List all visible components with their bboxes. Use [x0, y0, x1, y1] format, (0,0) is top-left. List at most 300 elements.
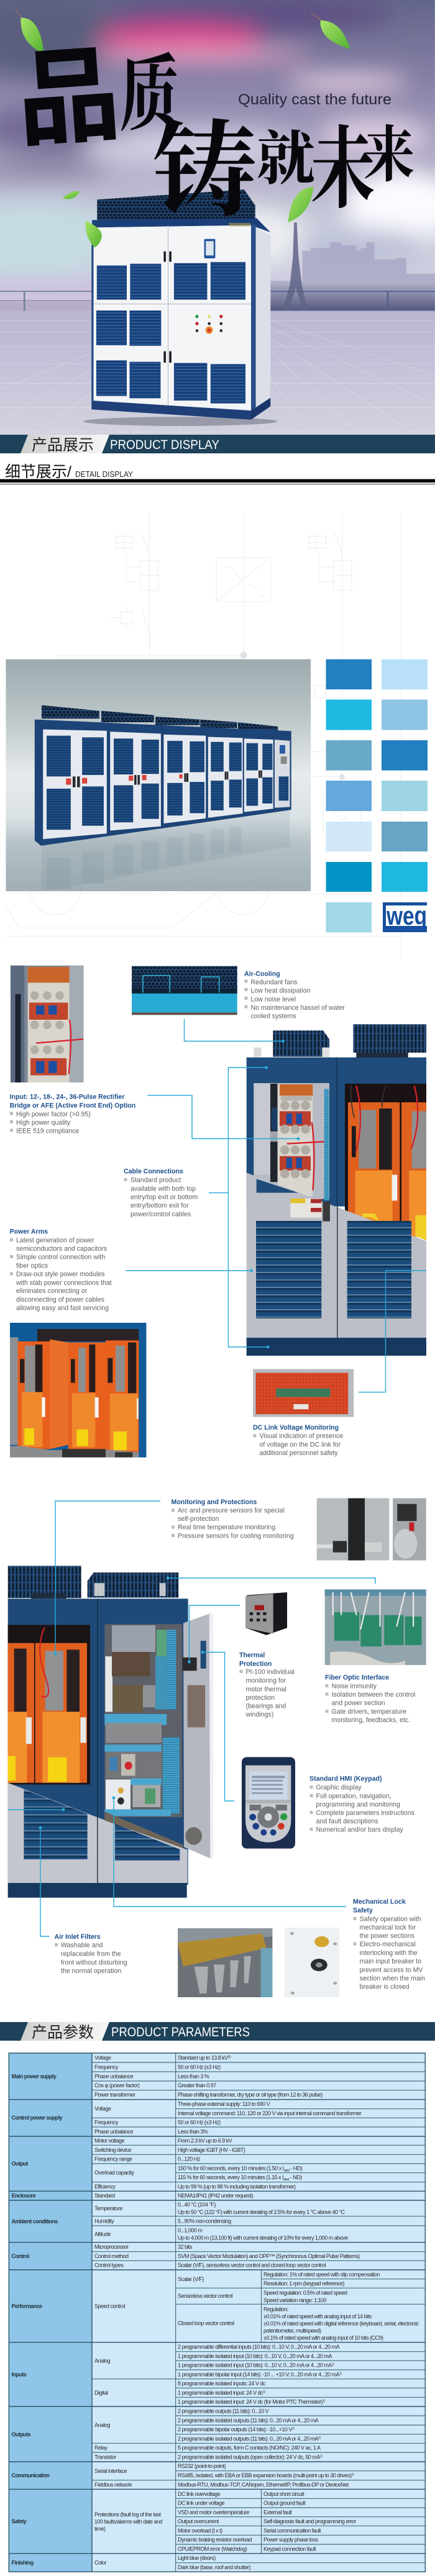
- yellow warning tags: [362, 1213, 426, 1240]
- table values: From 2.3 kV up to 6.9 kV: [178, 2138, 232, 2144]
- table values: 1): [320, 2454, 323, 2458]
- table group labels: Outputs: [11, 2431, 31, 2438]
- text: mechanical lock safety: Safety: [353, 1907, 373, 1914]
- louvres: [24, 1789, 180, 1861]
- text: air inlet filters: Washable and: [61, 1941, 103, 1949]
- text: fiber optic interface: Fiber Optic Interface: [325, 1674, 389, 1682]
- text: standard HMI: Standard HMI (Keypad): [309, 1775, 382, 1782]
- table values: RS232 (point-to-point): [178, 2463, 226, 2469]
- table parameter names: Analog: [94, 2357, 111, 2364]
- table values: VSD and motor overtemperature: [178, 2509, 249, 2515]
- power section: [8, 1625, 90, 1785]
- section banner: product parameters: 产品参数: [32, 2024, 94, 2041]
- text: power arms: semiconductors and capacitors: [16, 1245, 107, 1253]
- connector: HMI: [201, 1651, 234, 1801]
- text: monitoring and protections: [172, 1499, 294, 1540]
- table values: ±0.01% of rated speed with digital reference (keyboard, serial, electronic: [263, 2321, 419, 2327]
- table parameter names: Phase unbalance: [94, 2129, 134, 2135]
- text: fiber optic interface: Gate drivers, temperature: [332, 1708, 406, 1715]
- section banner: product parameters: [0, 2022, 435, 2041]
- table values: Less than 3 %: [178, 2073, 209, 2079]
- text: mechanical lock safety: prevent access to MV: [360, 1966, 423, 1974]
- eiffel tower: [282, 222, 308, 311]
- warning labels: [66, 774, 183, 785]
- terminals at base: [10, 1446, 139, 1458]
- table parameter names: Color: [94, 2560, 107, 2566]
- table group labels: Output: [11, 2161, 28, 2167]
- text: cable connections: entry/top exit or bottom: [130, 1194, 198, 1201]
- leaf on cabinet: [85, 221, 102, 247]
- text: DC link: Visual indication of presence: [260, 1433, 343, 1440]
- text: thermal protection: Protection: [239, 1660, 272, 1667]
- table values: 8 programmable isolated inputs: 24 V dc: [178, 2380, 266, 2387]
- text: standard HMI: [309, 1775, 414, 1834]
- text: air-cooling: cooled systems: [251, 1013, 296, 1020]
- text: standard HMI: and fault descriptions: [316, 1818, 378, 1825]
- text: power arms: eliminates connecting or: [16, 1287, 88, 1295]
- table parameter names: Serial interface: [94, 2468, 127, 2474]
- text: DC link: [253, 1424, 343, 1457]
- cabinet body: [8, 1599, 188, 1885]
- section banner: product parameters: PRODUCT PARAMETERS: [111, 2025, 250, 2039]
- text: power arms: Power Arms: [10, 1228, 48, 1236]
- table values: 1 programmable isolated input: 24 V dc: [178, 2390, 263, 2396]
- text: input rectifier: High power quality: [16, 1119, 71, 1127]
- table values: 2 programmable bipolar outputs (14 bits): -10...+10 V: [178, 2426, 292, 2433]
- section banner: product display: [0, 435, 435, 454]
- text: air-cooling: Redundant fans: [251, 979, 297, 986]
- table values: 2 programmable isolated outputs (open collector): 24 V dc, 50 mA: [178, 2454, 320, 2460]
- table parameter names: Transistor: [94, 2454, 116, 2460]
- text: cable connections: [124, 1168, 198, 1218]
- text: fiber optic interface: Isolation between the control: [332, 1691, 415, 1698]
- power module 1: [17, 1341, 50, 1449]
- text: mechanical lock safety: [353, 1898, 425, 1991]
- table values: 2 programmable isolated outputs (11 bits): 0...20 mA or 4...20 mA: [178, 2417, 319, 2423]
- louvres: [256, 1221, 411, 1318]
- table parameter names: Frequency range: [94, 2156, 132, 2162]
- cabinet body: [247, 1058, 426, 1207]
- table group labels: Communication: [11, 2472, 49, 2478]
- text: power arms: Latest generation of power: [16, 1237, 94, 1245]
- text: input rectifier: High power factor (>0.95): [16, 1110, 91, 1118]
- connector: input rectifier: [147, 1095, 300, 1140]
- text: cable connections: Standard product: [130, 1177, 181, 1184]
- table values: 2 programmable differential inputs (10 bits): 0...10 V, 0...20 mA or 4...20 mA: [178, 2344, 340, 2350]
- table values: 50 or 60 Hz (±3 Hz): [178, 2064, 221, 2070]
- text: thermal protection: (bearings and: [246, 1703, 286, 1710]
- table values: 2 programmable isolated outputs (11 bits): 0...20 mA or 4...20 mA: [178, 2436, 318, 2442]
- photos: arc and pressure sensors: [317, 1499, 426, 1561]
- text: standard HMI: Complete parameters instructions: [316, 1810, 414, 1817]
- text: thermal protection: protection: [246, 1694, 275, 1702]
- text: power arms: allowing easy and fast servicing: [16, 1305, 109, 1312]
- hero title: 铸就未来: 来: [364, 106, 414, 193]
- device: HMI keypad: [242, 1757, 295, 1849]
- text: fiber optic interface: monitoring, feedbacks, etc.: [332, 1717, 410, 1724]
- text: mechanical lock safety: Safety operation with: [360, 1915, 421, 1923]
- table parameter names: Voltage: [94, 2106, 111, 2112]
- table values: DC link overvoltage: [178, 2491, 221, 2497]
- sub heading: detail display: 细节展示/: [5, 463, 71, 481]
- text: standard HMI: programming and monitoring: [316, 1801, 400, 1808]
- table values: Output ground fault: [263, 2500, 306, 2506]
- text: mechanical lock safety: the power sections: [360, 1933, 414, 1940]
- table parameter names: Frequency: [94, 2120, 119, 2126]
- table values: High voltage IGBT (HV - IGBT): [178, 2147, 245, 2153]
- table parameter names: Control method: [94, 2253, 129, 2259]
- text: air inlet filters: the normal operation: [61, 1967, 121, 1975]
- railing left: [0, 291, 91, 311]
- power module middle door: [50, 1340, 68, 1449]
- text: cable connections: power/control cables: [130, 1211, 191, 1218]
- table values: 1 programmable isolated input (10 bits): 0...10 V, 0...20 mA or 4...20 mA: [178, 2362, 332, 2369]
- text: power arms: with stab power connections that: [16, 1279, 112, 1287]
- photo: fiber optic interface: [325, 1589, 426, 1665]
- table values: Three-phase external supply: 110 to 690 V: [178, 2101, 270, 2107]
- hero title: 铸就未来: 未: [311, 98, 375, 225]
- section banner: product display: 产品展示: [32, 437, 94, 454]
- table parameter names: Standard: [94, 2193, 115, 2199]
- table values: ±0.1% of rated speed with analog input of 10 bits (CC9): [263, 2335, 383, 2341]
- table values: Up to 50 °C (122 °F) with current derating of 2.5% for every 1 °C above 40 °C: [178, 2209, 346, 2215]
- table values: 1): [352, 2473, 354, 2477]
- photo: input rectifier: [11, 966, 83, 1082]
- product cabinet: [83, 189, 277, 426]
- text: input rectifier: Input: 12-, 18-, 24-, 36-Pulse Rectifier: [10, 1093, 124, 1100]
- table values: Scalar (V/F): [178, 2276, 204, 2282]
- table values: Up to 99 % (up to 98 % including isolation transformer): [178, 2184, 296, 2190]
- text: monitoring and protections: self-protection: [178, 1515, 219, 1523]
- open door: [182, 1613, 213, 1859]
- text: input rectifier: Bridge or AFE (Active Front End) Option: [10, 1102, 135, 1109]
- hero title: 铸就未来: [152, 88, 414, 237]
- table values: 1): [323, 2400, 325, 2403]
- table parameter names: Overload capacity: [94, 2170, 135, 2176]
- louvre vents: [96, 262, 245, 403]
- roof grille: [97, 189, 255, 220]
- text: thermal protection: [239, 1652, 295, 1718]
- connector: air-cooling: [184, 1019, 285, 1043]
- table values: NEMA1/IP41 (IP42 under request): [178, 2193, 253, 2199]
- photo: DC link monitor: [253, 1369, 354, 1417]
- table values: 150 % for 60 seconds, every 10 minutes (1.50 x I: [178, 2165, 284, 2171]
- power module 3: [106, 1340, 139, 1452]
- table values: 1): [339, 2372, 342, 2376]
- table values: 50 or 60 Hz (±3 Hz): [178, 2120, 221, 2126]
- text: mechanical lock safety: breaker is closed: [360, 1984, 410, 1991]
- table values: Speed regulation: 0.5% of rated speed: [263, 2290, 347, 2296]
- table values: 1): [332, 2363, 334, 2367]
- text: standard HMI: Graphic display: [316, 1784, 362, 1791]
- table values: ±0.01% of rated speed with analog input of 14 bits: [263, 2313, 372, 2320]
- table parameter names: Analog: [94, 2422, 111, 2428]
- table values: 5...90% non-condensing: [178, 2218, 231, 2225]
- table group labels: Performance: [11, 2303, 42, 2309]
- table values: Less than 3%: [178, 2129, 208, 2135]
- table group labels: [11, 2073, 63, 2566]
- table parameter names: time): [94, 2526, 106, 2532]
- table parameter names: Humidity: [94, 2218, 114, 2225]
- text: fiber optic interface: and power section: [332, 1700, 385, 1707]
- base plinth: [247, 1338, 426, 1356]
- table values: [178, 2054, 419, 2570]
- control panel: [280, 745, 287, 764]
- text: DC link: DC Link Voltage Monitoring: [253, 1424, 339, 1431]
- hero banner: [0, 0, 435, 436]
- table group labels: Ambient conditions: [11, 2218, 58, 2225]
- text: air-cooling: Air-Cooling: [244, 970, 280, 977]
- cabinet body: [35, 719, 291, 846]
- table group labels: Control: [11, 2253, 29, 2259]
- text: input rectifier: [10, 1093, 135, 1135]
- text: monitoring and protections: Arc and pressure sensors for special: [178, 1507, 285, 1515]
- text: air-cooling: [244, 970, 345, 1020]
- text: mechanical lock safety: mechanical lock for: [360, 1924, 416, 1931]
- text: mechanical lock safety: main input breaker to: [360, 1958, 421, 1966]
- text: air-cooling: Low heat dissipation: [251, 987, 311, 995]
- sub heading: detail display: [0, 463, 435, 484]
- table values: Dynamic braking resistor overload: [178, 2537, 252, 2543]
- table values: 1 programmable isolated input: 24 V dc (for Motor PTC Thermistor): [178, 2399, 323, 2405]
- text: air inlet filters: Air Inlet Filters: [55, 1933, 101, 1941]
- table background: [9, 2053, 425, 2572]
- table values: Up to 4,000 m (13,100 ft) with current derating of 10% for every 1,000 m above: [178, 2235, 348, 2241]
- table values: 1 programmable bipolar input (14 bits): -10 ... +10 V, 0...20 mA or 4...20 mA: [178, 2371, 339, 2377]
- text: standard HMI: Full operation, navigation,: [316, 1792, 392, 1800]
- text: air-cooling: Low noise level: [251, 995, 296, 1003]
- table parameter names: Phase unbalance: [94, 2073, 134, 2079]
- table values: Dark blue (base, roof and shutter): [178, 2564, 250, 2570]
- text: air inlet filters: [55, 1933, 127, 1975]
- table parameter names: Relay: [94, 2445, 108, 2451]
- table values: 1 programmable isolated input (10 bits): 0...10 V, 0...20 mA or 4...20 mA: [178, 2353, 332, 2359]
- table values: 0...120 Hz: [178, 2156, 201, 2162]
- connector: cable connections: [209, 1066, 269, 1348]
- table parameter names: Microprocessor: [94, 2244, 129, 2250]
- table values: Light blue (doors): [178, 2555, 216, 2561]
- connector: mechanical lock: [112, 1797, 346, 1907]
- text: power arms: [10, 1228, 112, 1312]
- connector: thermal: [188, 1605, 240, 1663]
- table values: Closed loop vector control: [178, 2320, 234, 2326]
- text: power arms: disconnecting of power cables: [16, 1296, 104, 1304]
- control section: [104, 1624, 182, 1817]
- table group labels: Main power supply: [11, 2073, 57, 2079]
- table parameter names: Control types: [94, 2262, 124, 2269]
- text: thermal protection: windings): [245, 1711, 273, 1718]
- table values: Regulation: 1% of rated speed with slip compensation: [263, 2272, 380, 2278]
- table values: 2 programmable outputs (11 bits): 0...10 V: [178, 2408, 269, 2415]
- text: thermal protection: monitoring for: [246, 1677, 286, 1684]
- table parameter names: Switching device: [94, 2147, 132, 2153]
- opening: rectifier section: [254, 1083, 329, 1200]
- connector: fiber optic: [167, 1577, 375, 1584]
- brand mark: [229, 223, 250, 227]
- table values: Standard up to 13.8 kV: [178, 2054, 228, 2061]
- connector: DC link: [359, 1271, 426, 1392]
- table values: 1): [318, 2436, 321, 2440]
- connector: air inlet filters: [39, 1826, 50, 1936]
- device: thermal protection relay: [245, 1592, 287, 1635]
- leaf top right: [311, 13, 350, 49]
- table values: (1): [228, 2056, 231, 2059]
- faint schematic motors at bottom: [6, 863, 401, 937]
- lower grey doors: [8, 1783, 188, 1884]
- table values: CPU/EPROM error (Watchdog): [178, 2546, 247, 2552]
- photo: mechanical lock panel: [285, 1928, 339, 1997]
- parameters table: [9, 2053, 425, 2572]
- table parameter names: Voltage: [94, 2054, 111, 2061]
- text: thermal protection: motor thermal: [246, 1685, 286, 1693]
- text: power arms: Simple control connection with: [16, 1254, 105, 1261]
- table values: Scalar (V/F), sensorless vector control and closed loop vector control: [178, 2262, 326, 2269]
- hero title: 品质: [13, 27, 180, 160]
- table values: Keypad connection fault: [263, 2546, 316, 2552]
- table parameter names: Temperature: [94, 2205, 123, 2211]
- table values: 115 % for 60 seconds, every 10 minutes (1.15 x I: [178, 2174, 283, 2180]
- hero background: sky, horizon and floor: [0, 0, 435, 436]
- table parameter names: Fieldbus network: [94, 2482, 132, 2488]
- door louvres: [47, 736, 288, 830]
- table values: - HD): [289, 2165, 303, 2171]
- sub heading: detail display: DETAIL DISPLAY: [75, 469, 133, 479]
- section banner: product display: PRODUCT DISPLAY: [110, 438, 219, 452]
- connector: monitoring: [54, 1501, 160, 1655]
- text: air-cooling: No maintenance hassel of water: [251, 1004, 345, 1012]
- table values: Phase-shifting transformer, dry type or oil type (from 12 to 36 pulse): [178, 2092, 323, 2098]
- text: thermal protection: Pt-100 individual: [246, 1669, 295, 1676]
- roof fan units: [8, 1566, 178, 1599]
- leaf small: [62, 191, 80, 199]
- table values: Regulation:: [263, 2306, 288, 2313]
- photo: multi-cabinet drive line-up: [6, 660, 311, 891]
- table values: 1): [292, 2427, 295, 2431]
- table values: Sensorless vector control: [178, 2293, 233, 2299]
- text: mechanical lock safety: Mechanical Lock: [353, 1898, 406, 1905]
- table parameter names: Protections (fault log of the last: [94, 2511, 162, 2518]
- table values: Modbus-RTU, Modbus-TCP, CANopen, Ethernet/IP, Profibus-DP or DeviceNet: [178, 2482, 349, 2488]
- table values: Output overcurrent: [178, 2518, 219, 2524]
- table group labels: Control power supply: [11, 2115, 63, 2121]
- table group labels: Finishing: [11, 2560, 34, 2566]
- roof fan units: [254, 1024, 426, 1058]
- table values: potentiometer, multispeed): [263, 2328, 321, 2334]
- cabinet cut-away: upper view: [247, 1024, 426, 1237]
- table values: 0...40 °C (104 °F): [178, 2202, 216, 2208]
- table values: Speed variation range: 1:100: [263, 2297, 327, 2303]
- table group labels: Safety: [11, 2518, 27, 2524]
- text: fiber optic interface: [325, 1674, 415, 1724]
- tagline: Quality cast the future: [238, 91, 392, 108]
- base plinth: [8, 1883, 187, 1898]
- table values: Greater than 0.97: [178, 2082, 216, 2088]
- table values: 0...1,000 m: [178, 2228, 202, 2234]
- photo: air cooling roof: [132, 966, 237, 1015]
- table parameter names: Cos φ (power factor): [94, 2082, 140, 2088]
- table values: 1): [263, 2390, 265, 2394]
- table values: Power supply phase loss: [263, 2537, 319, 2543]
- roof fan units: [42, 705, 278, 731]
- text: air inlet filters: replaceable from the: [61, 1950, 121, 1957]
- table parameter names: Altitude: [94, 2231, 111, 2237]
- table values: 32 bits: [178, 2244, 193, 2250]
- text: cable connections: available with both top: [130, 1185, 196, 1192]
- table parameter names: Motor voltage: [94, 2138, 125, 2144]
- table values: Output short circuit: [263, 2491, 304, 2497]
- table group labels: Inputs: [11, 2371, 27, 2377]
- door latch: [323, 1202, 330, 1222]
- colour swatches: [326, 660, 428, 933]
- table group labels: Enclosure: [11, 2193, 36, 2199]
- table values: 5 programmable outputs, form C contacts (NO/NC): 240 V ac, 1 A: [178, 2445, 321, 2451]
- table parameter names: 100 faults/alarms with date and: [94, 2519, 163, 2525]
- text: monitoring and protections: Real time temperature monitoring: [178, 1524, 275, 1531]
- table values: Internal voltage command: 110, 120 or 220 V via input internal command transformer: [178, 2110, 362, 2116]
- text: fiber optic interface: Noise immunity: [332, 1683, 377, 1690]
- faint circuit schematic background: [55, 514, 401, 960]
- table parameter names: Speed control: [94, 2303, 126, 2309]
- text: mechanical lock safety: Electro-mechanical: [360, 1941, 416, 1948]
- leaf over title: [288, 187, 313, 222]
- distant city: [270, 242, 435, 311]
- photo: power arms: [10, 1323, 146, 1458]
- table parameter names: Digital: [94, 2390, 108, 2396]
- connector: power arms: [126, 1269, 253, 1272]
- door handles and warning labels: [73, 771, 262, 787]
- table values: SVM (Space Vector Modulation) and OPP™ (Synchronous Optimal Pulse Patterns): [178, 2253, 360, 2259]
- floor reflection: [42, 810, 290, 891]
- table parameter names: Power transformer: [94, 2092, 135, 2098]
- table values: - ND): [289, 2174, 302, 2180]
- table grid lines: [9, 2053, 425, 2572]
- photo: mechanical lock keys: [178, 1928, 272, 1997]
- text: DC link: of voltage on the DC link for: [260, 1441, 341, 1448]
- table values: rated: [283, 2178, 290, 2182]
- power module 2: [68, 1343, 106, 1449]
- text: mechanical lock safety: interlocking with the: [360, 1949, 418, 1957]
- table values: rated: [284, 2169, 290, 2172]
- hero title: 铸就未来: 铸: [152, 88, 257, 237]
- cabinet cut-away 2: [8, 1566, 213, 1898]
- table values: RS485, isolated, with EBA or EBB expansion boards (multi-point up to 30 drives): [178, 2472, 352, 2478]
- cabinet cut-away: lower doors and base: [247, 1172, 426, 1356]
- table values: External fault: [263, 2509, 292, 2515]
- text: power arms: fiber optics: [16, 1262, 48, 1269]
- warning labels: [290, 1199, 321, 1218]
- text: cable connections: Cable Connections: [124, 1168, 183, 1175]
- text: cable connections: entry/bottom exit for: [130, 1202, 189, 1210]
- text: input rectifier: IEEE 519 compliance: [16, 1128, 79, 1135]
- table values: Motor overload (I x t): [178, 2528, 222, 2534]
- text: monitoring and protections: Pressure sensors for cooling monitoring: [178, 1532, 294, 1540]
- keypad: [204, 239, 215, 258]
- table parameter names: [94, 2054, 163, 2566]
- text: standard HMI: Numerical and/or bars display: [316, 1826, 403, 1834]
- table values: Serial communication fault: [263, 2528, 321, 2534]
- table values: DC link under voltage: [178, 2500, 225, 2506]
- text: mechanical lock safety: section when the main: [360, 1975, 425, 1982]
- text: monitoring and protections: Monitoring and Protections: [172, 1499, 257, 1506]
- hero title: 品质: 质: [119, 27, 180, 148]
- text: DC link: additional personnel safety: [260, 1449, 338, 1457]
- table parameter names: Efficiency: [94, 2184, 116, 2190]
- text: power arms: Draw-out style power modules: [16, 1271, 104, 1278]
- connector: power section sensor: [8, 1808, 65, 1811]
- hero title: 品质: 品: [13, 36, 124, 160]
- table values: Self-diagnosis fault and programming error: [263, 2518, 356, 2524]
- doors: [43, 730, 290, 839]
